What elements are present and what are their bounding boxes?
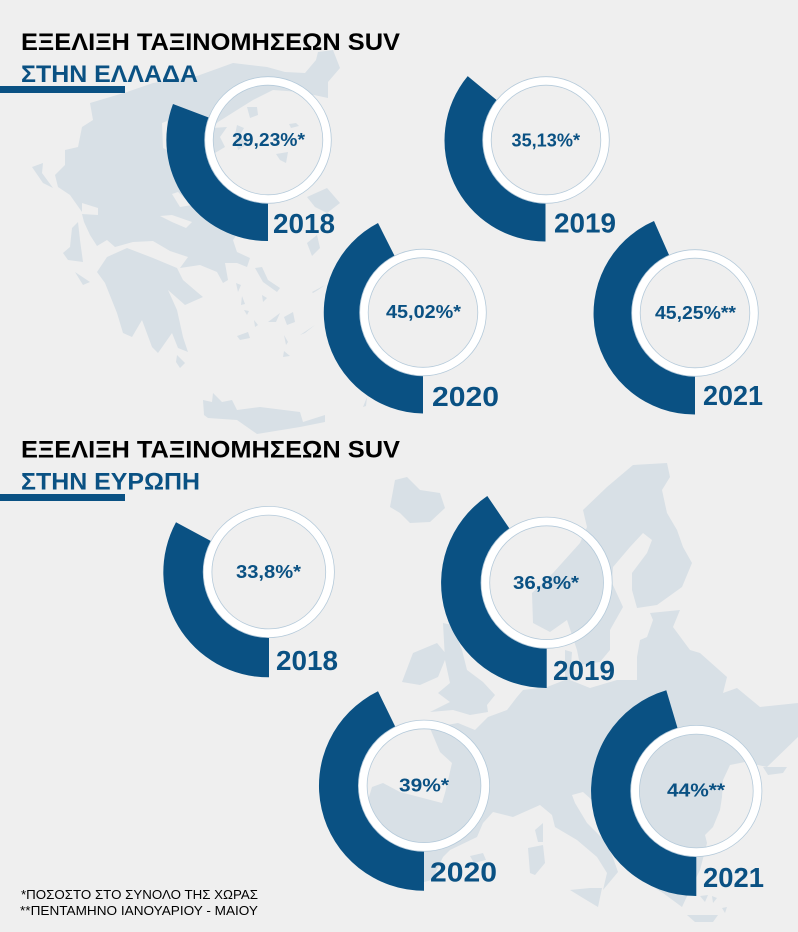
donut: Europe 2018 [163, 506, 338, 677]
heading: Greece: ΕΞΕΛΙΞΗ ΤΑΞΙΝΟΜΗΣΕΩΝ SUV [21, 29, 400, 56]
donut: Greece 2018: 2018 [273, 208, 335, 239]
donut: Europe 2020: 2020 [430, 857, 497, 888]
donut: Greece 2020: 2020 [432, 381, 499, 412]
donut: Europe 2021: 2021 [703, 862, 764, 893]
donut: Europe 2018: 33,8%* [236, 562, 301, 582]
donut: Europe 2019: 2019 [553, 655, 615, 686]
donut: Greece 2019: 2019 [554, 208, 616, 239]
donut: Europe 2021 [591, 690, 764, 896]
donut: Greece 2018 [166, 77, 335, 241]
donut: Greece 2020: 45,02%* [386, 302, 461, 322]
donut: Greece 2019: 35,13%* [512, 130, 580, 150]
map: Europe [360, 463, 798, 922]
donut: Europe 2019 [441, 496, 615, 688]
underline bar: Europe [0, 494, 125, 501]
footnotes: *ΠΟΣΟΣΤΟ ΣΤΟ ΣΥΝΟΛΟ ΤΗΣ ΧΩΡΑΣ [21, 887, 258, 902]
donut: Europe 2020 [319, 691, 497, 891]
donut: Greece 2021: 2021 [703, 380, 763, 411]
donut: Greece 2020 [324, 223, 499, 414]
donut: Europe 2019: 36,8%* [513, 573, 579, 593]
map: Greece [32, 50, 367, 434]
donut: Europe 2020: 39%* [399, 776, 449, 796]
donut: Greece 2021 [594, 221, 763, 415]
footnotes: **ΠΕΝΤΑΜΗΝΟ ΙΑΝΟΥΑΡΙΟΥ - ΜΑΙΟΥ [20, 903, 258, 918]
donut: Europe 2021: 44%** [667, 781, 725, 801]
donut: Greece 2018: 29,23%* [232, 130, 305, 150]
donut: Europe 2018: 2018 [276, 645, 338, 676]
heading: Europe: ΕΞΕΛΙΞΗ ΤΑΞΙΝΟΜΗΣΕΩΝ SUV [21, 436, 400, 464]
subheading: Greece: ΣΤΗΝ ΕΛΛΑΔΑ [21, 61, 198, 88]
footnotes [20, 887, 258, 918]
underline bar: Greece [0, 86, 125, 93]
donut: Greece 2019 [445, 76, 616, 241]
donut: Greece 2021: 45,25%** [655, 303, 736, 323]
subheading: Europe: ΣΤΗΝ ΕΥΡΩΠΗ [21, 468, 200, 496]
